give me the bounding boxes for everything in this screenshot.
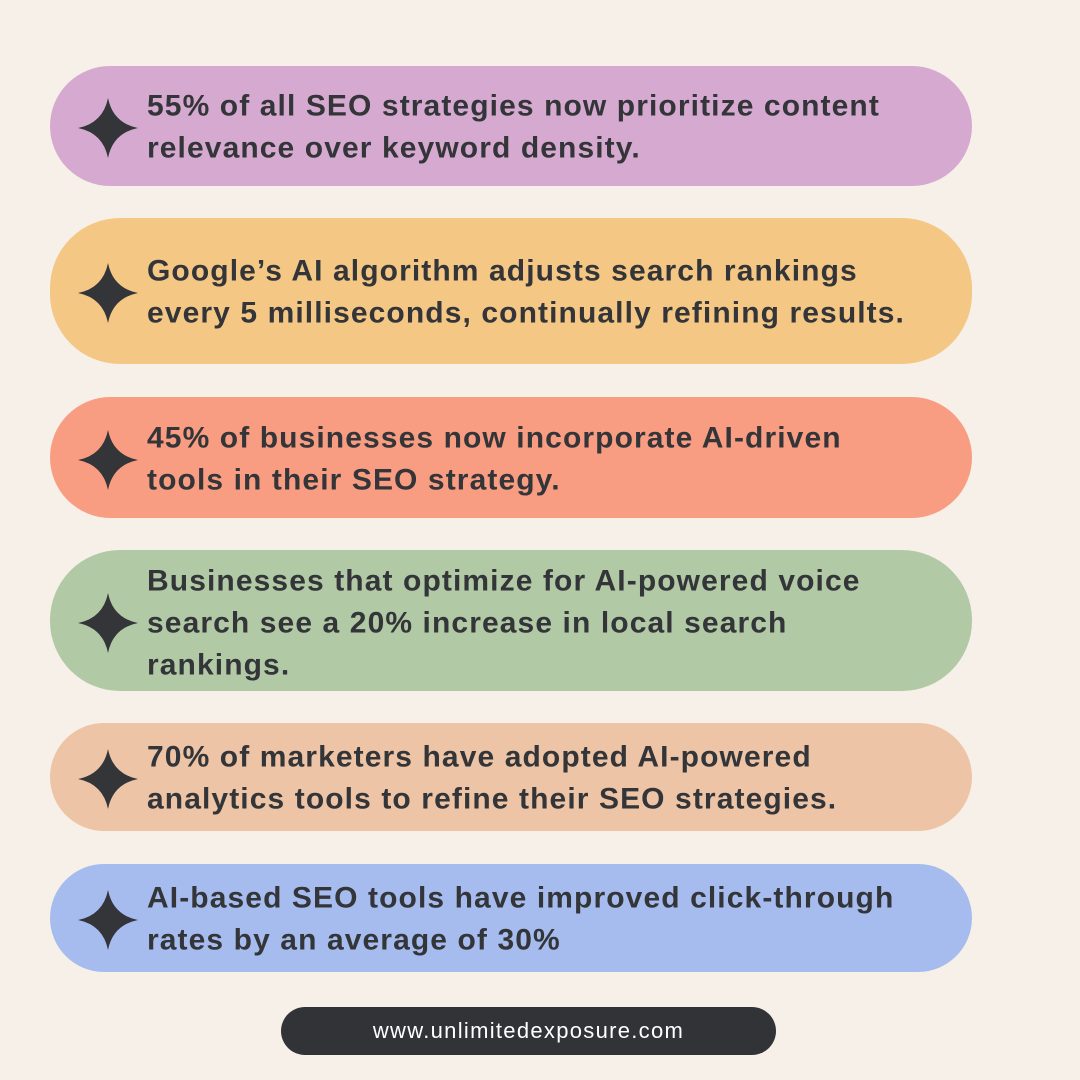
icon: star	[78, 593, 138, 653]
text: stat 4: search see a 20% increase in local search	[147, 606, 788, 639]
text: stat 5: 70% of marketers have adopted AI-powered	[147, 741, 812, 774]
icon: star	[78, 430, 138, 490]
text: stat 2: Google’s AI algorithm adjusts search rankings	[147, 255, 858, 288]
text: stat 2: every 5 milliseconds, continually refining results.	[147, 297, 905, 330]
text: stat 1: 55% of all SEO strategies now prioritize content	[147, 90, 880, 123]
panel: stat 1	[50, 66, 972, 186]
text: stat 1: relevance over keyword density.	[147, 132, 641, 165]
text: stat 5	[147, 741, 837, 816]
footer: website url: www.unlimitedexposure.com	[373, 1018, 684, 1043]
footer: website url	[281, 1007, 776, 1055]
text: stat 6: AI-based SEO tools have improved click-through	[147, 882, 894, 915]
text: stat 6: rates by an average of 30%	[147, 924, 561, 957]
panel: stat 2	[50, 218, 972, 364]
text: stat 4: Businesses that optimize for AI-powered voice	[147, 564, 861, 597]
text: stat 2	[147, 255, 905, 330]
text: stat 4: rankings.	[147, 648, 290, 681]
text: stat 3: tools in their SEO strategy.	[147, 463, 561, 496]
icon: star	[78, 749, 138, 809]
panel: stat 6	[50, 864, 972, 972]
icon: star	[78, 263, 138, 323]
text: stat 3	[147, 421, 842, 496]
text: stat 3: 45% of businesses now incorporate AI-driven	[147, 421, 842, 454]
text: stat 1	[147, 90, 880, 165]
icon: star	[78, 98, 138, 158]
text: stat 5: analytics tools to refine their SEO strategies.	[147, 783, 837, 816]
text: stat 6	[147, 882, 894, 957]
panel: stat 5	[50, 723, 972, 831]
panel: stat 4	[50, 550, 972, 691]
panel: stat 3	[50, 397, 972, 518]
text: stat 4	[147, 564, 861, 681]
icon: star	[78, 890, 138, 950]
